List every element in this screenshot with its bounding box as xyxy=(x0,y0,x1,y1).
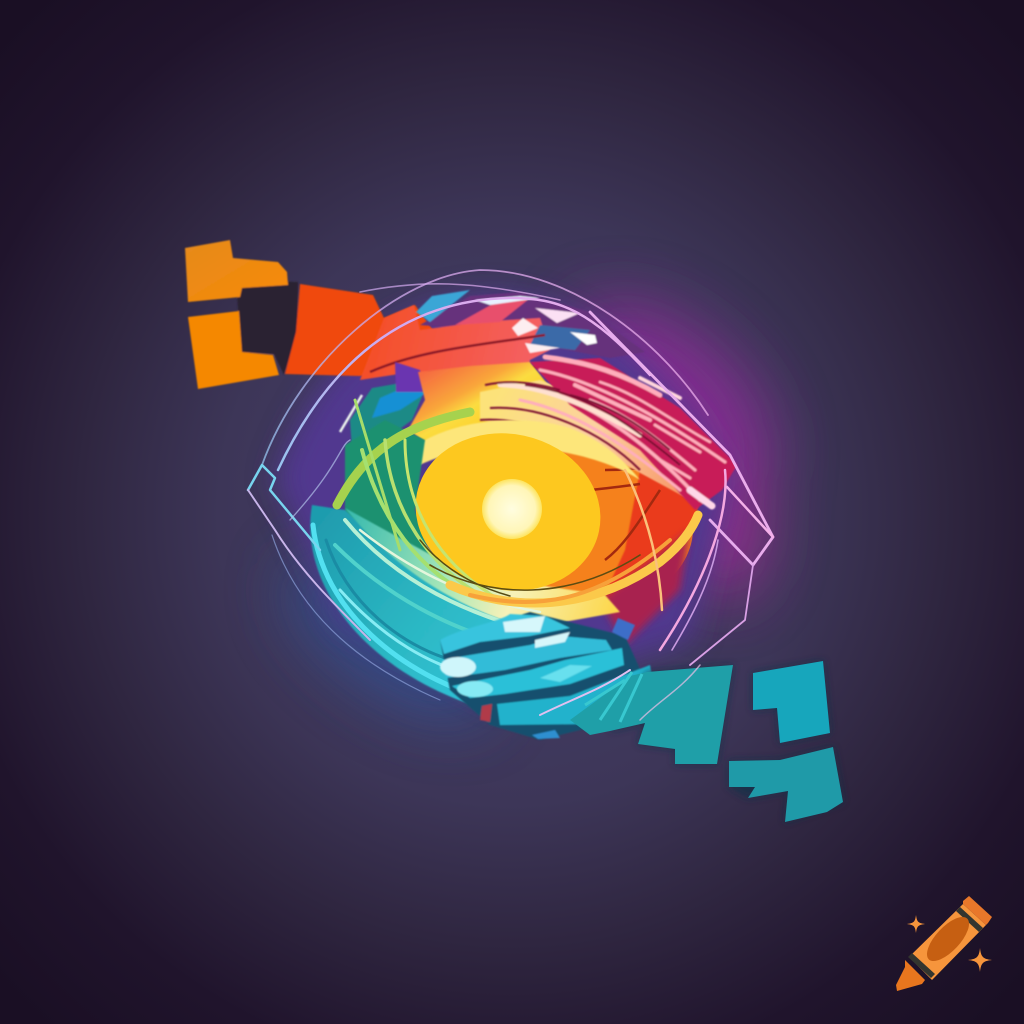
dark iris cracks xyxy=(590,465,660,560)
crayon lower band xyxy=(908,953,935,978)
orange-salmon band below ribbon xyxy=(408,362,560,445)
green left iris xyxy=(345,420,440,585)
green-yellow arcs and teal strands xyxy=(313,400,698,700)
teal streaks xyxy=(585,672,642,722)
dark ribbon cracks xyxy=(370,335,545,373)
finger three xyxy=(452,648,624,698)
crayon body xyxy=(909,904,986,980)
large sparkle xyxy=(968,948,992,972)
blue square fleck xyxy=(612,618,635,640)
white shards xyxy=(535,308,580,323)
crayon tip xyxy=(896,960,925,991)
teal lower ribbon fill xyxy=(310,505,540,715)
orange blocks, top left xyxy=(185,240,440,389)
crayon cap xyxy=(963,896,992,925)
coral upper wedge xyxy=(455,298,530,325)
glow behind the eye xyxy=(263,264,810,750)
orange block lower xyxy=(188,311,279,389)
dark purple diamond region xyxy=(420,292,645,358)
pale feather fill under the disc xyxy=(345,508,620,628)
block upper right xyxy=(753,661,830,743)
peach streak wedge above iris xyxy=(480,380,700,500)
purple shard xyxy=(395,362,424,392)
sun core xyxy=(482,479,542,539)
blue shard right xyxy=(530,325,590,350)
hand shadow xyxy=(440,612,645,740)
finger highlights xyxy=(503,616,570,648)
magenta lower iris xyxy=(600,530,690,645)
teal and blue feathers, upper left xyxy=(340,362,440,450)
wire outlines xyxy=(248,270,773,720)
block lower right xyxy=(729,747,843,822)
blue shard xyxy=(416,290,470,322)
orange iris xyxy=(416,389,714,645)
yellow sun disc xyxy=(401,416,615,608)
block left xyxy=(570,665,733,764)
violet interior of the wire outline xyxy=(275,295,730,700)
crimson hatched band xyxy=(480,357,737,510)
shadow block xyxy=(236,280,298,375)
teal blocks, bottom right xyxy=(570,661,843,822)
finger one xyxy=(440,614,570,654)
dark hatch strokes xyxy=(480,382,680,470)
crayon upper band xyxy=(956,907,983,932)
finger three tip xyxy=(457,681,493,697)
small sparkle xyxy=(907,915,925,933)
coral ribbon xyxy=(360,305,550,388)
red iris wedge xyxy=(600,470,700,605)
crayon oval xyxy=(920,910,976,968)
finger four xyxy=(497,665,655,725)
upper ribbon: coral and red xyxy=(360,290,645,388)
finger two xyxy=(442,636,612,678)
pale yellow upper lid xyxy=(405,420,640,480)
finger two tip xyxy=(440,657,476,677)
block shadows xyxy=(610,661,843,822)
pink hatch strokes xyxy=(500,357,725,506)
red-orange block xyxy=(285,284,440,376)
crayon logo xyxy=(896,896,992,991)
small blue fleck xyxy=(532,730,560,739)
orange block upper xyxy=(185,240,288,302)
hand shape, lower centre xyxy=(440,612,655,740)
small red fleck xyxy=(480,704,492,722)
